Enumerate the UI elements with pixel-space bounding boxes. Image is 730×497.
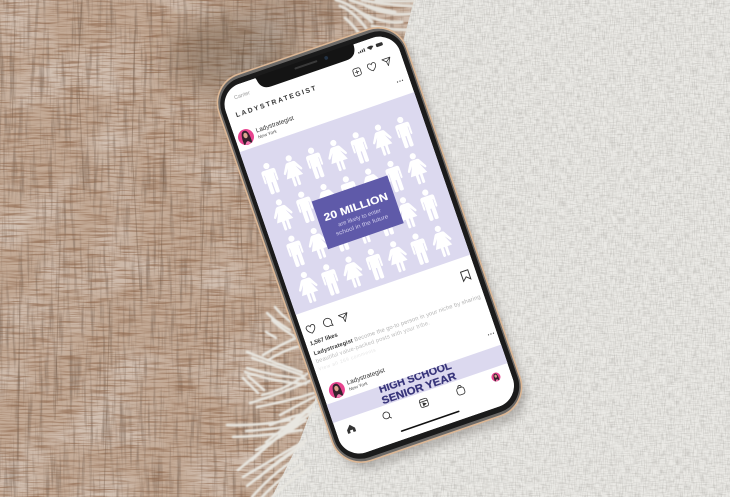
- app header: brand name: LADYSTRATEGIST: [235, 85, 318, 119]
- caption: View all 269 comments: [318, 347, 377, 373]
- nav icon: search: [382, 412, 392, 420]
- camera: [324, 55, 329, 60]
- icon: heart header: [367, 62, 376, 72]
- home indicator: [401, 410, 460, 432]
- background: linen fabric: [273, 0, 730, 497]
- phone shadow: [214, 25, 535, 478]
- likes count: 1,567 likes: [309, 332, 339, 348]
- nav icon: home: [347, 424, 356, 434]
- next post header: avatar: [328, 382, 345, 398]
- icon: comment: [322, 317, 333, 328]
- phone frame: [208, 19, 531, 471]
- icon: send header: [382, 56, 390, 66]
- phone mockup: [208, 19, 531, 471]
- people pictogram grid: [256, 114, 456, 305]
- caption: Ladystrategist Become the go-to person in your niche by sharing: [313, 294, 482, 357]
- next post: lavender band with headline: [325, 342, 509, 425]
- post header: location: New York: [257, 128, 278, 140]
- next post: lavender band with headline: SENIOR YEAR: [380, 370, 458, 407]
- next post header: location: New York: [348, 380, 369, 392]
- icon: more dots top: [397, 79, 403, 83]
- next post header: user name: Ladystrategist: [346, 367, 386, 387]
- phone screen: [218, 30, 521, 460]
- fabric fringe: top: [336, 0, 414, 32]
- icon: share: [338, 312, 348, 322]
- fabric fringe: bottom left: [227, 307, 316, 497]
- icon: more dots second post: [488, 332, 494, 336]
- app header: carrier: Carrier: [233, 90, 251, 101]
- status bar icons: [357, 42, 383, 54]
- notch: [255, 43, 358, 90]
- callout: 20 million: are likely to enter: [337, 208, 382, 228]
- post header: user name: Ladystrategist: [255, 115, 295, 135]
- nav icon: reels: [419, 398, 429, 408]
- icon: add post: [352, 67, 362, 77]
- icon: bookmark: [461, 270, 471, 281]
- post header: avatar: [238, 129, 254, 145]
- callout: 20 million: school in the future: [335, 214, 389, 238]
- next post: lavender band with headline: HIGH SCHOOL: [377, 360, 454, 396]
- speaker: [294, 60, 318, 70]
- icon: like: [306, 324, 316, 334]
- nav icon: profile avatar: [492, 372, 500, 382]
- callout: 20 million: [312, 175, 404, 249]
- nav icon: shop: [456, 385, 466, 396]
- caption: beautiful value-packed posts with your tribe.: [315, 320, 431, 365]
- callout: 20 million: 20 MILLION: [322, 191, 390, 224]
- post image: lavender background: [239, 92, 471, 315]
